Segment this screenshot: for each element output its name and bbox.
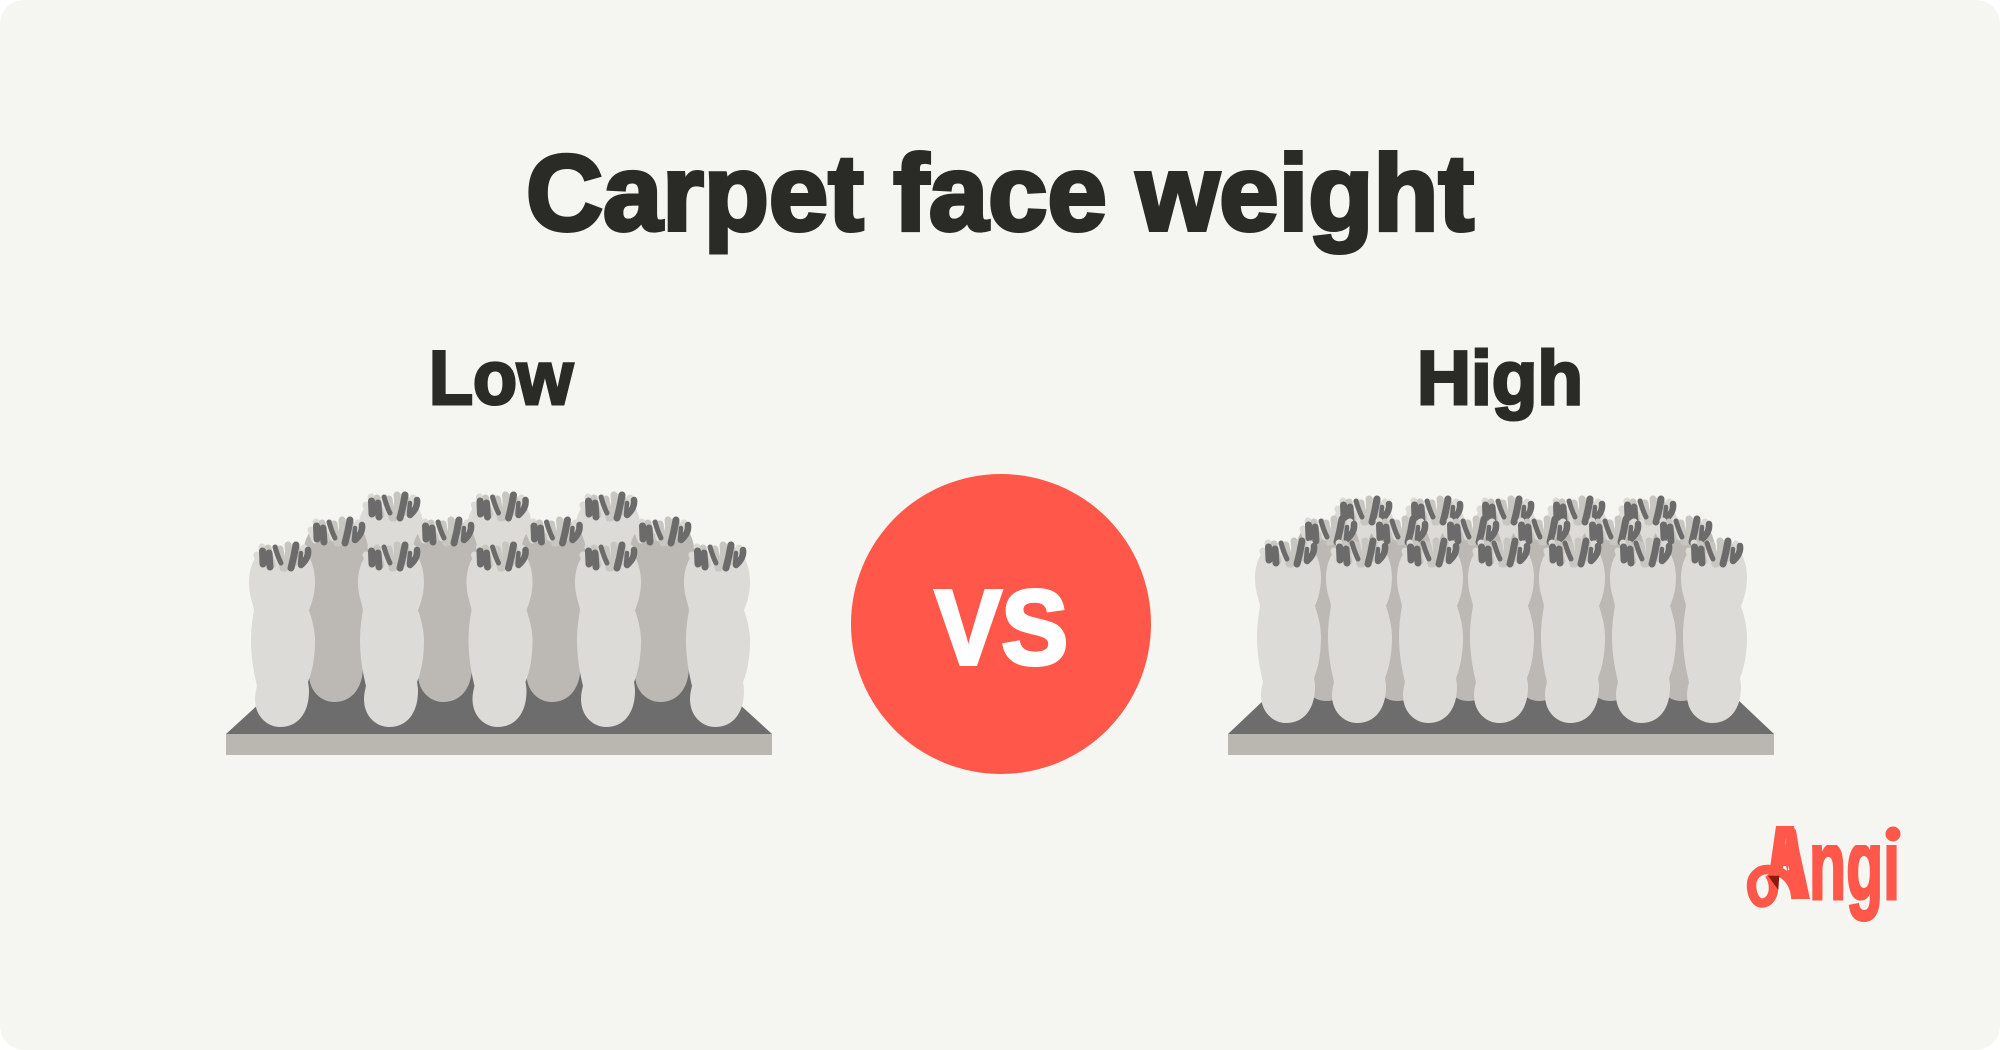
vs badge	[851, 474, 1151, 774]
heading: low: Low	[429, 336, 574, 421]
logo: Angi: ngi	[1809, 809, 1900, 921]
heading: high: High	[1417, 336, 1583, 421]
carpet illustration: high face weight	[1228, 499, 1774, 755]
carpet illustration: low face weight	[226, 495, 772, 755]
logo: Angi	[1746, 826, 1900, 922]
vs badge: VS	[935, 569, 1068, 687]
logo: Angi: A	[1776, 809, 1808, 921]
title: Carpet face weight	[526, 132, 1474, 253]
